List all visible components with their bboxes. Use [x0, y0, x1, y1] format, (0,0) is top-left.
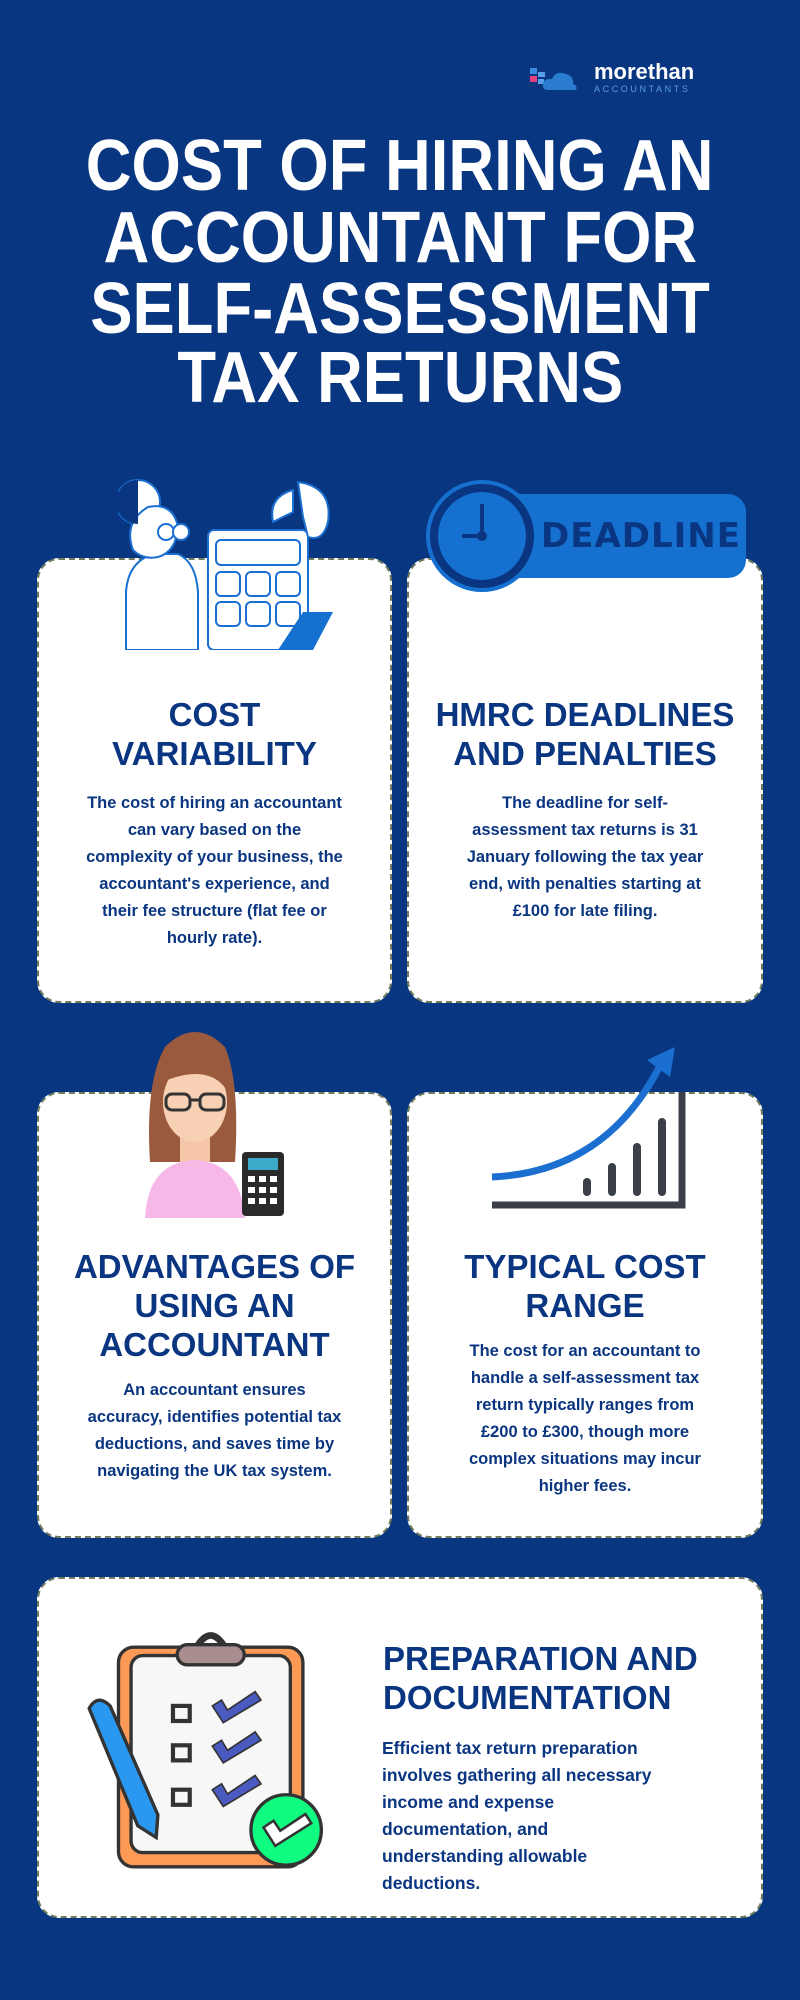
- logo: [530, 59, 694, 94]
- text: typical cost: The cost for an accountant to: [469, 1342, 701, 1360]
- text: advantages: accuracy, identifies potential tax: [88, 1408, 341, 1426]
- heading: advantages: ACCOUNTANT: [99, 1326, 330, 1363]
- heading: preparation: [383, 1640, 698, 1716]
- heading: preparation: DOCUMENTATION: [383, 1679, 671, 1716]
- heading: cost variability: [112, 696, 317, 772]
- text: hmrc: £100 for late filing.: [513, 902, 657, 920]
- title: ACCOUNTANT FOR: [103, 198, 697, 278]
- text: typical cost: handle a self-assessment tax: [471, 1369, 699, 1387]
- icon: clipboard checklist: [87, 1632, 323, 1868]
- heading: advantages: USING AN: [134, 1287, 295, 1324]
- panel: hmrc deadlines: [407, 558, 763, 1003]
- text: advantages: deductions, and saves time by: [95, 1435, 334, 1453]
- text: cost variability: their fee structure (flat fee or: [102, 902, 327, 920]
- heading: preparation: PREPARATION AND: [383, 1640, 698, 1677]
- heading: hmrc: [436, 696, 734, 772]
- text: typical cost: return typically ranges from: [476, 1396, 694, 1414]
- text: hmrc: January following the tax year: [467, 848, 703, 866]
- text: hmrc: end, with penalties starting at: [469, 875, 701, 893]
- text: cost variability: can vary based on the: [128, 821, 301, 839]
- title: TAX RETURNS: [177, 338, 623, 418]
- heading: hmrc: HMRC DEADLINES: [436, 696, 734, 733]
- heading: typical cost: RANGE: [525, 1287, 645, 1324]
- text: preparation: understanding allowable: [382, 1846, 587, 1866]
- text: advantages: [88, 1381, 342, 1480]
- text: hmrc: The deadline for self-: [502, 794, 668, 812]
- text: hmrc: [467, 794, 704, 920]
- text: typical cost: £200 to £300, though more: [481, 1423, 689, 1441]
- text: hmrc: assessment tax returns is 31: [472, 821, 698, 839]
- text: cost variability: accountant's experience, and: [99, 875, 330, 893]
- heading: cost variability: VARIABILITY: [112, 735, 317, 772]
- panel: cost variability: [37, 558, 392, 1003]
- text: preparation: deductions.: [382, 1873, 480, 1893]
- text: advantages: An accountant ensures: [123, 1381, 306, 1399]
- icon: woman with calculator illustration: [118, 479, 333, 650]
- title: [86, 126, 714, 418]
- icon: clock deadline banner: DEADLINE: [541, 516, 741, 556]
- heading: typical cost: TYPICAL COST: [464, 1248, 706, 1285]
- icon: clock deadline banner: [426, 480, 746, 592]
- text: preparation: Efficient tax return preparation: [382, 1738, 638, 1758]
- text: cost variability: complexity of your business, the: [86, 848, 343, 866]
- heading: hmrc: AND PENALTIES: [453, 735, 717, 772]
- text: typical cost: higher fees.: [539, 1477, 631, 1495]
- text: typical cost: complex situations may incur: [469, 1450, 701, 1468]
- panel: advantages: [37, 1092, 392, 1538]
- heading: advantages: [74, 1248, 355, 1363]
- heading: typical cost: [464, 1248, 706, 1324]
- text: cost variability: hourly rate).: [167, 929, 262, 947]
- text: preparation: involves gathering all necessary: [382, 1765, 651, 1785]
- panel: preparation: [37, 1577, 763, 1918]
- title: SELF-ASSESSMENT: [90, 269, 710, 349]
- icon: woman avatar with calculator: [145, 1032, 284, 1218]
- logo: morethan: [594, 59, 694, 84]
- logo: ACCOUNTANTS: [594, 84, 690, 94]
- text: advantages: navigating the UK tax system.: [97, 1462, 332, 1480]
- text: preparation: [382, 1738, 652, 1893]
- text: preparation: income and expense: [382, 1792, 554, 1812]
- heading: cost variability: COST: [169, 696, 260, 733]
- text: typical cost: [469, 1342, 701, 1495]
- panel: typical cost: [407, 1092, 763, 1538]
- text: cost variability: [86, 794, 343, 947]
- icon: growth chart: [492, 1047, 686, 1208]
- title: COST OF HIRING AN: [86, 126, 714, 206]
- heading: advantages: ADVANTAGES OF: [74, 1248, 355, 1285]
- text: preparation: documentation, and: [382, 1819, 548, 1839]
- text: cost variability: The cost of hiring an accountant: [87, 794, 342, 812]
